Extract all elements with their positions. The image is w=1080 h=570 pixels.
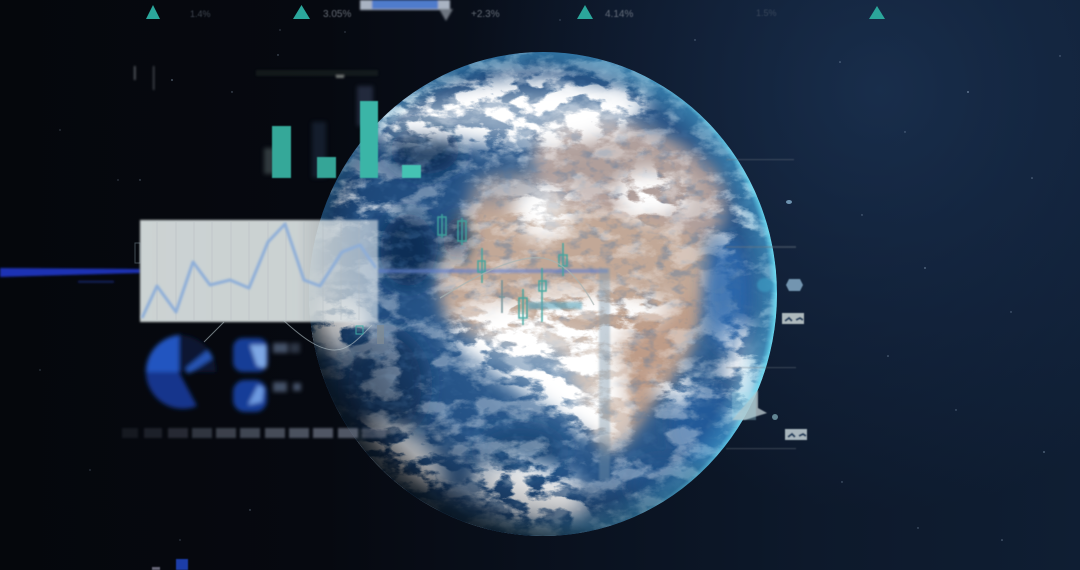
soft cloud haze (385, 92, 755, 425)
candle 3 (478, 248, 485, 283)
thin data lines (726, 159, 796, 449)
earth globe (300, 50, 780, 540)
ticker item 1: 1.4% (190, 9, 211, 19)
ticker item 2 (293, 5, 351, 20)
ghost bars (264, 86, 373, 178)
blue pie chart (146, 335, 216, 409)
trend line (142, 224, 376, 318)
icon: small badge bottom (785, 429, 807, 440)
faint chart ticks upper left (134, 66, 378, 90)
arc line over globe (440, 258, 594, 305)
dark oceans (343, 126, 752, 511)
bars (272, 101, 421, 178)
fine surface detail (332, 56, 759, 536)
vertical translucent bar (599, 268, 610, 480)
blue horizontal streak (0, 268, 608, 282)
land masses (438, 118, 726, 452)
small legend bars (273, 343, 301, 392)
grid columns (157, 222, 359, 320)
panel fill (140, 220, 378, 322)
candle 7 (559, 243, 567, 276)
candle 1 (438, 214, 446, 238)
translucent line chart panel (140, 220, 378, 322)
blue donut segments (233, 338, 268, 412)
ticker item 5 (756, 6, 885, 19)
ticker item 3: +2.3% (471, 9, 500, 20)
teal bar chart (264, 86, 421, 178)
dense cloud fields (300, 50, 780, 540)
teal square marker (356, 326, 363, 334)
icon: translucent box with pointer (732, 390, 767, 420)
segmented progress strip (122, 428, 386, 438)
ticker item 4: 4.14% (605, 9, 633, 20)
candle 4 (499, 280, 505, 313)
candle 5 (519, 289, 527, 325)
night side shadow (309, 144, 716, 536)
ticker item 5: 1.5% (756, 8, 777, 18)
icon: dot by pointer (772, 414, 778, 420)
right side icons (726, 159, 807, 449)
left outline marker (135, 243, 140, 263)
icon: disc on globe edge (757, 278, 773, 292)
icon: small dot (786, 200, 792, 204)
candle 2 (458, 218, 466, 245)
ticker item 4 (577, 5, 633, 20)
thin curve below panel (204, 320, 372, 350)
candle 6 (539, 268, 546, 322)
bottom blue fragment (152, 559, 188, 570)
horizontal teal highlight (528, 302, 582, 309)
ticker item 1 (146, 5, 211, 19)
scattered clouds (300, 50, 780, 540)
icon: hexagon (786, 279, 803, 291)
icon: small badge top (782, 313, 804, 324)
top ticker (146, 0, 885, 21)
blurred top tab with arrow (360, 0, 453, 21)
small grey marker on globe edge (377, 325, 384, 344)
ticker item 2: 3.05% (323, 9, 351, 20)
candlestick chart over globe (438, 214, 567, 325)
atmosphere rim (309, 52, 777, 536)
